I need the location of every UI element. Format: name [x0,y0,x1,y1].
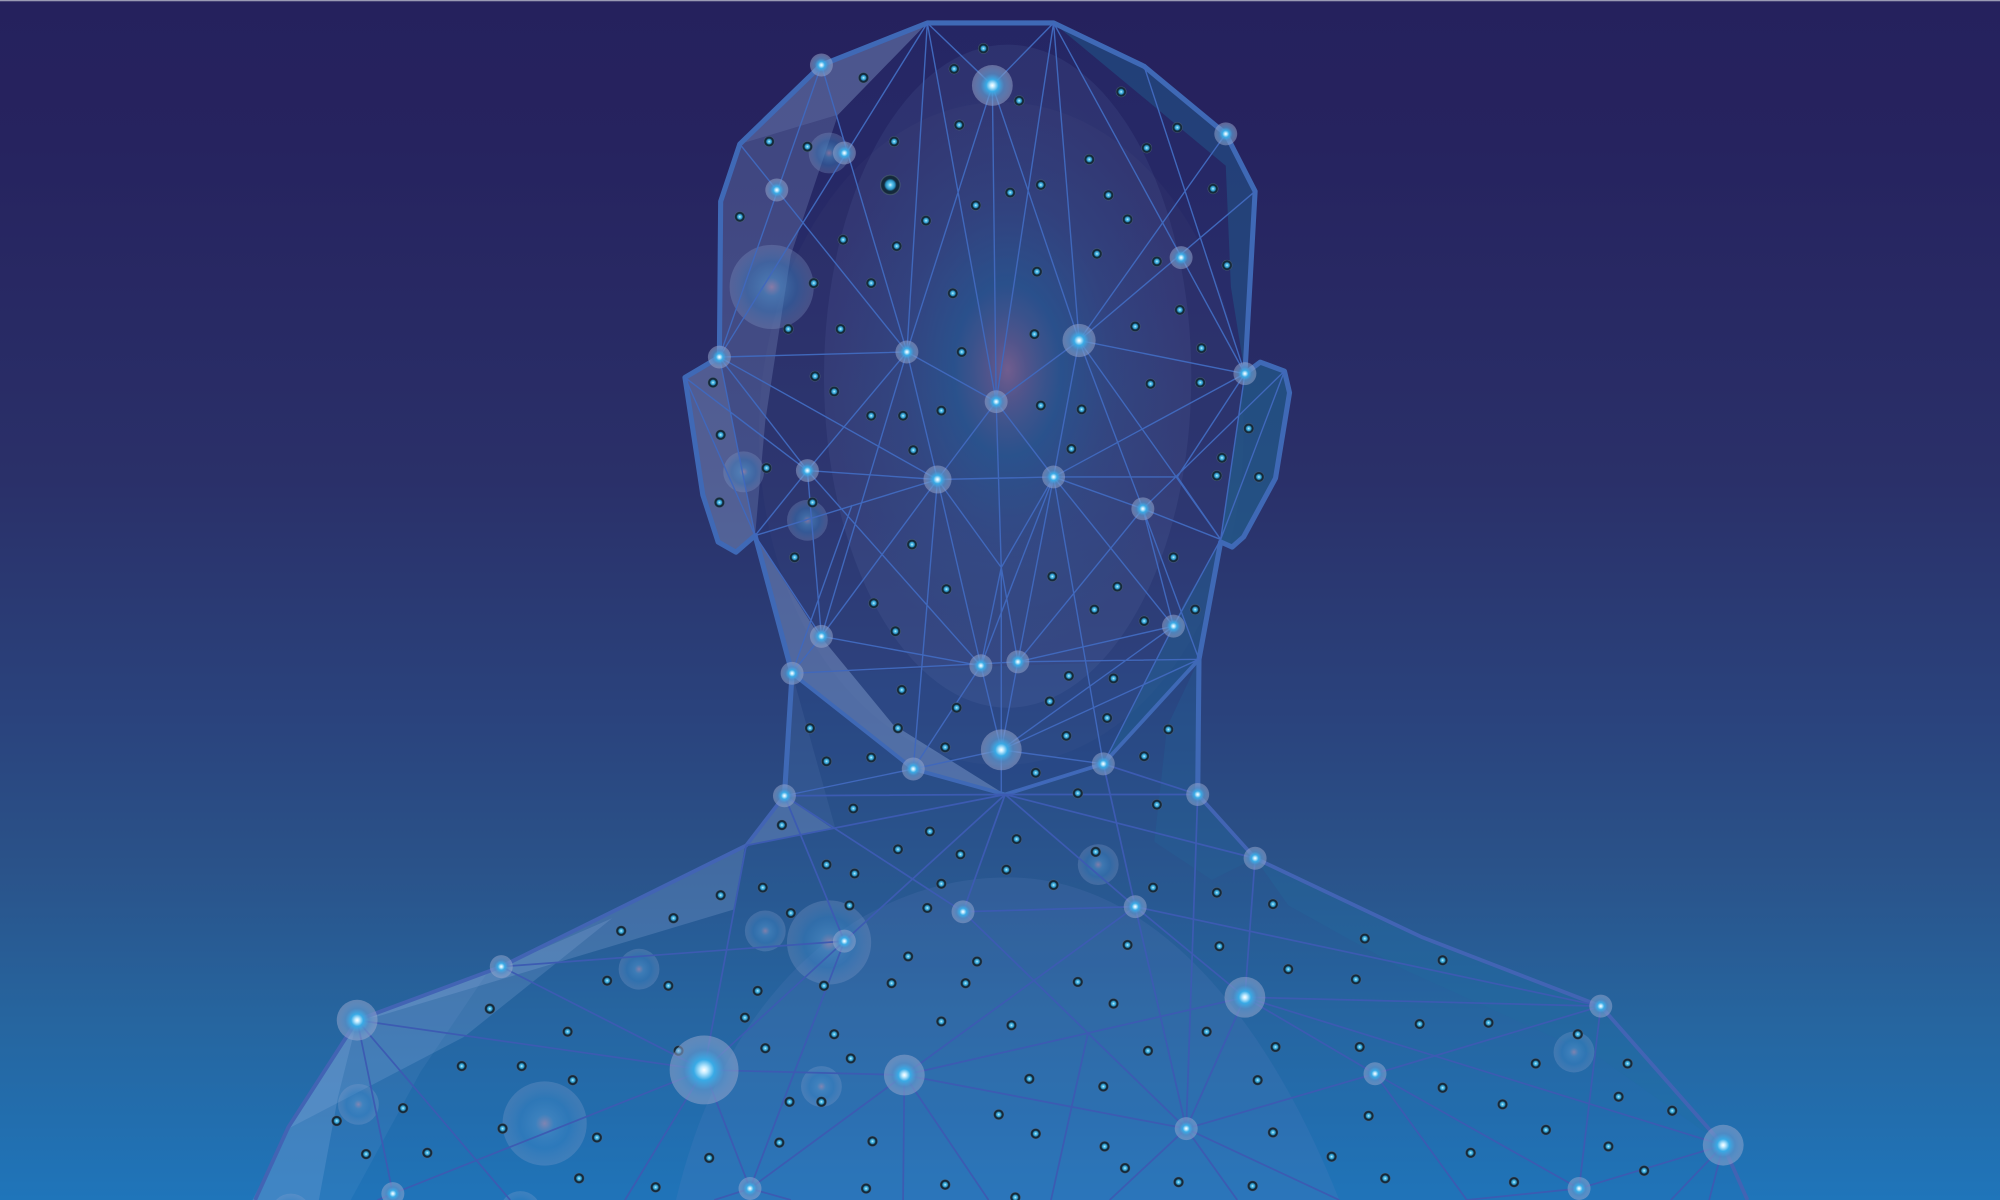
right shoulder teal facets [1154,659,1723,1145]
head left light facets [685,23,1005,794]
body network nodes [337,783,1744,1200]
shoulder outline [255,794,1747,1200]
head right teal facets [1054,23,1290,764]
face central glow [894,175,1121,534]
translucent spheres [270,133,1594,1200]
top edge line [0,0,2000,1]
face oval base [824,45,1191,606]
jawline [792,659,1199,794]
sensor dots [331,43,1678,1200]
head network nodes [708,54,1256,780]
body silhouette [253,659,1747,1200]
head and neck outline [685,23,1290,796]
shoulder light facets [253,673,835,1200]
body network lines [357,764,1723,1200]
outer face band [759,102,1244,765]
head silhouette [685,23,1290,796]
torso dome highlight [676,877,1339,1200]
head network lines [685,23,1284,796]
